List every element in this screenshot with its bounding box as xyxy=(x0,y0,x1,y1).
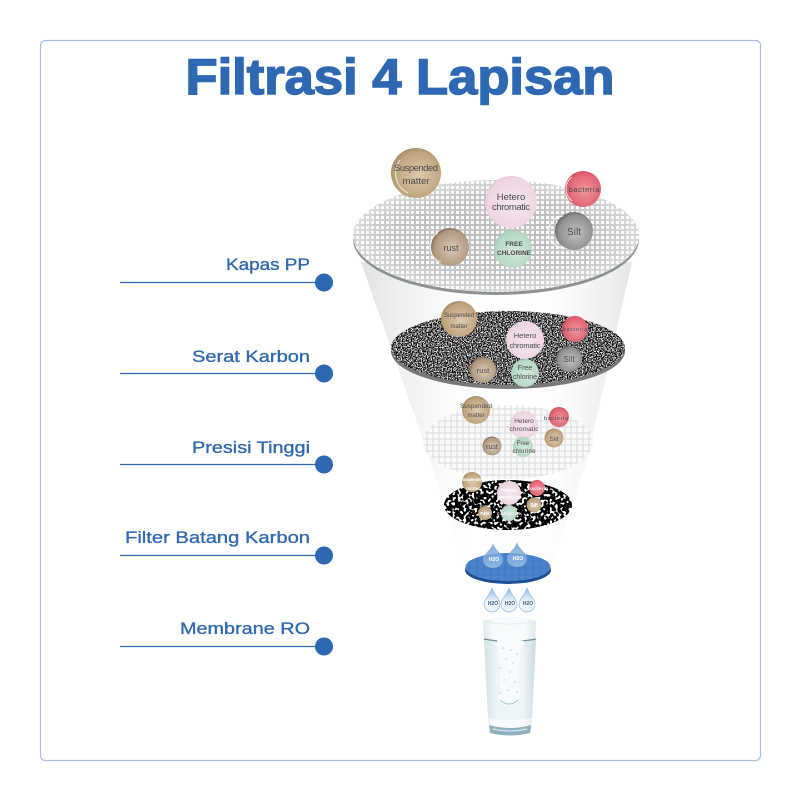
sphere: suspended matter xyxy=(460,396,492,424)
drop: right: H2O xyxy=(523,601,533,607)
sphere: rust: rust xyxy=(480,511,490,517)
sphere: bacteria: bacteria xyxy=(568,185,600,194)
sphere: silt: Silt xyxy=(563,355,575,364)
sphere: bacteria: bacteria xyxy=(544,416,569,422)
sphere: suspended matter xyxy=(461,472,483,492)
sphere: hetero chromatic: Hetero xyxy=(501,488,517,494)
sphere: hetero chromatic xyxy=(510,411,539,439)
funnel body xyxy=(361,262,632,570)
label: Membrane RO xyxy=(120,619,333,656)
sphere: hetero chromatic: chromatic xyxy=(497,495,521,501)
sphere: hetero chromatic: Hetero xyxy=(497,192,525,203)
drop: left: H2O xyxy=(488,601,498,607)
label: Presisi Tinggi: Presisi Tinggi xyxy=(192,438,310,457)
sphere: silt: Silt xyxy=(530,503,538,509)
sphere: rust xyxy=(470,357,496,383)
label: Presisi Tinggi xyxy=(120,438,333,474)
sphere: suspended matter: matter xyxy=(450,324,468,330)
label: Filter Batang Karbon xyxy=(120,528,333,564)
sphere: hetero chromatic: chromatic xyxy=(492,202,530,213)
layer 2: carbon fibre xyxy=(391,301,625,389)
sphere: silt xyxy=(548,212,593,250)
sphere: free chlorine xyxy=(494,230,532,268)
sphere: rust: rust xyxy=(443,243,459,253)
sphere: hetero chromatic: chromatic xyxy=(510,426,539,433)
label: Serat Karbon xyxy=(120,347,333,382)
layer 1: PP cotton mesh xyxy=(353,148,639,295)
sphere: rust xyxy=(430,228,469,266)
sphere: suspended matter xyxy=(391,148,441,198)
sphere: suspended matter: Suspended xyxy=(394,163,438,174)
sphere: bacteria xyxy=(562,316,588,342)
drop: membrane right: H2O xyxy=(513,556,523,562)
drop: membrane left: H2O xyxy=(489,557,499,563)
label: Membrane RO: Membrane RO xyxy=(180,619,310,638)
sphere: suspended matter: Suspended xyxy=(460,404,492,410)
label: Kapas PP: Kapas PP xyxy=(226,255,310,274)
sphere: free chlorine xyxy=(511,359,539,387)
sphere: free chlorine: Free xyxy=(518,365,532,372)
sphere: free chlorine: chlorine xyxy=(512,449,536,455)
drop: middle: H2O xyxy=(505,601,515,607)
sphere: silt: Silt xyxy=(549,436,559,443)
sphere: suspended matter: matter xyxy=(467,413,485,419)
sphere: free chlorine: Free xyxy=(517,441,530,447)
sphere: silt: Silt xyxy=(567,227,581,238)
sphere: free chlorine: CHLORINE xyxy=(497,250,532,257)
sphere: suspended matter: Suspended xyxy=(444,313,474,319)
sphere: free chlorine: chlorine xyxy=(513,374,537,381)
sphere: suspended matter: matter xyxy=(466,486,480,491)
label: Filter Batang Karbon: Filter Batang Karbon xyxy=(125,528,310,547)
sphere: silt xyxy=(544,428,564,448)
sphere: free chlorine: FREE xyxy=(505,241,523,248)
layer 4: carbon rod filter xyxy=(444,472,572,530)
sphere: silt xyxy=(556,346,582,372)
sphere: rust: rust xyxy=(486,444,498,451)
sphere: suspended matter: Suspended xyxy=(461,477,483,482)
sphere: suspended matter xyxy=(441,301,477,337)
glass of water xyxy=(483,616,536,736)
sphere: suspended matter: matter xyxy=(403,176,429,187)
layer 5: blue RO membrane xyxy=(465,542,551,584)
sphere: hetero chromatic xyxy=(506,321,544,359)
sphere: free chlorine: chlorine xyxy=(497,511,521,516)
sphere: hetero chromatic xyxy=(485,176,537,228)
label: Kapas PP xyxy=(120,255,333,292)
water drops xyxy=(484,588,535,612)
sphere: free chlorine xyxy=(512,437,536,457)
layer 3: high precision mesh xyxy=(423,396,593,479)
sphere: hetero chromatic xyxy=(497,481,521,505)
sphere: bacteria xyxy=(544,407,569,427)
title: Filtrasi 4 Lapisan xyxy=(186,49,614,105)
sphere: bacteria: bacteria xyxy=(563,327,587,333)
sphere: bacteria: bacteria xyxy=(528,486,548,491)
label: Serat Karbon: Serat Karbon xyxy=(192,347,310,366)
sphere: bacteria xyxy=(565,171,601,207)
sphere: hetero chromatic: Hetero xyxy=(514,331,536,340)
sphere: rust: rust xyxy=(477,366,490,375)
sphere: hetero chromatic: chromatic xyxy=(510,341,541,350)
sphere: rust xyxy=(482,436,502,456)
sphere: hetero chromatic: Hetero xyxy=(514,418,534,425)
